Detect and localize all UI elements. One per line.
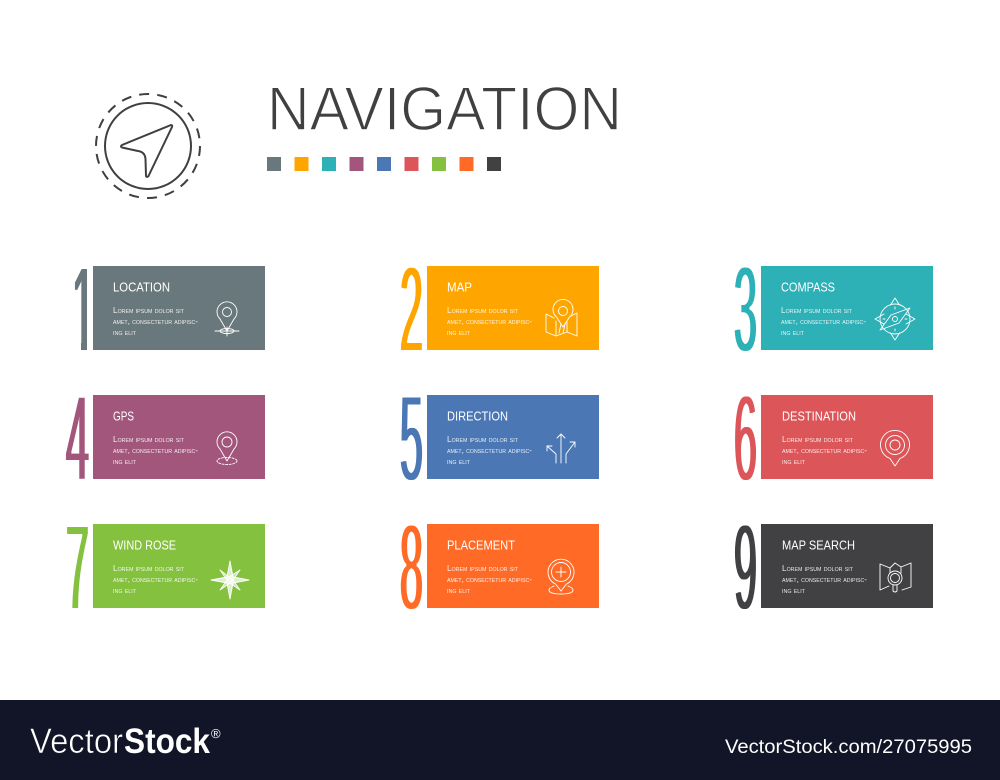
heading: compass: COMPASS (781, 280, 835, 294)
body text: Lorem ipsum dolor sit (113, 564, 184, 573)
footer logo: Vector (30, 722, 123, 761)
body text: Lorem ipsum dolor sit (782, 564, 853, 573)
body text: amet, consectetur adipisc- (782, 446, 867, 455)
body text (781, 306, 866, 337)
number 2: 2 (400, 243, 423, 378)
footer image id: VectorStock.com/27075995 (725, 737, 972, 758)
heading: map: MAP (447, 280, 472, 294)
icon: wind rose (211, 561, 249, 599)
number 1: 1 (72, 243, 95, 378)
body text: ing elit (447, 586, 470, 595)
body text (447, 306, 532, 337)
body text (113, 435, 198, 466)
body text (782, 564, 867, 595)
number 6: 6 (734, 372, 757, 507)
body text: ing elit (782, 457, 805, 466)
footer logo: Stock (124, 722, 210, 761)
body text (113, 564, 198, 595)
body text: ing elit (113, 586, 136, 595)
icon: compass (875, 298, 915, 340)
panel: 5 direction (400, 372, 599, 507)
body text: Lorem ipsum dolor sit (781, 306, 852, 315)
body text: amet, consectetur adipisc- (113, 317, 198, 326)
body text: ing elit (781, 328, 804, 337)
body text: amet, consectetur adipisc- (113, 446, 198, 455)
icon: map search (880, 563, 911, 592)
number 9: 9 (734, 501, 757, 636)
panel: 3 compass (734, 243, 933, 378)
body text (113, 306, 198, 337)
panel: 9 map search (734, 501, 933, 636)
body text: ing elit (447, 328, 470, 337)
body text (447, 435, 532, 466)
number 4: 4 (66, 372, 89, 507)
footer logo (30, 722, 221, 761)
body text: ing elit (782, 586, 805, 595)
number 3: 3 (734, 243, 757, 378)
heading: gps: GPS (113, 410, 134, 424)
body text: ing elit (113, 328, 136, 337)
heading: destination: DESTINATION (782, 410, 856, 424)
body text: amet, consectetur adipisc- (447, 446, 532, 455)
body text: Lorem ipsum dolor sit (113, 435, 184, 444)
panel: 8 placement (400, 501, 599, 636)
body text: ing elit (447, 457, 470, 466)
body text: amet, consectetur adipisc- (782, 575, 867, 584)
panel: 7 wind rose (66, 501, 265, 636)
number 8: 8 (400, 501, 423, 636)
title: NAVIGATION (267, 75, 622, 144)
number 5: 5 (400, 372, 423, 507)
body text (782, 435, 867, 466)
icon: gps pin (217, 432, 237, 464)
body text: Lorem ipsum dolor sit (782, 435, 853, 444)
panel: 2 map (400, 243, 599, 378)
body text: amet, consectetur adipisc- (447, 317, 532, 326)
body text (447, 564, 532, 595)
colour swatches (267, 157, 501, 171)
number 7: 7 (66, 501, 89, 636)
icon: map (546, 299, 577, 336)
icon: placement pin with plus (548, 559, 574, 594)
icon: direction arrows (547, 434, 575, 463)
body text: amet, consectetur adipisc- (447, 575, 532, 584)
body text: Lorem ipsum dolor sit (447, 306, 518, 315)
icon: navigation arrow in dashed circle (96, 94, 200, 198)
body text: ing elit (113, 457, 136, 466)
body text: Lorem ipsum dolor sit (447, 435, 518, 444)
body text: Lorem ipsum dolor sit (447, 564, 518, 573)
panel: 1 location (60, 243, 265, 378)
icon: location pin (215, 302, 239, 336)
footer logo: ® (211, 726, 221, 741)
heading: placement: PLACEMENT (447, 538, 515, 552)
panel: 6 destination (734, 372, 933, 507)
panel: 4 gps (66, 372, 265, 507)
footer bar (0, 700, 1000, 780)
icon: destination target (880, 430, 910, 466)
body text: amet, consectetur adipisc- (113, 575, 198, 584)
heading: map search: MAP SEARCH (782, 538, 855, 552)
body text: amet, consectetur adipisc- (781, 317, 866, 326)
body text: Lorem ipsum dolor sit (113, 306, 184, 315)
heading: location: LOCATION (113, 280, 170, 294)
heading: wind rose: WIND ROSE (113, 538, 176, 552)
heading: direction: DIRECTION (447, 410, 508, 424)
